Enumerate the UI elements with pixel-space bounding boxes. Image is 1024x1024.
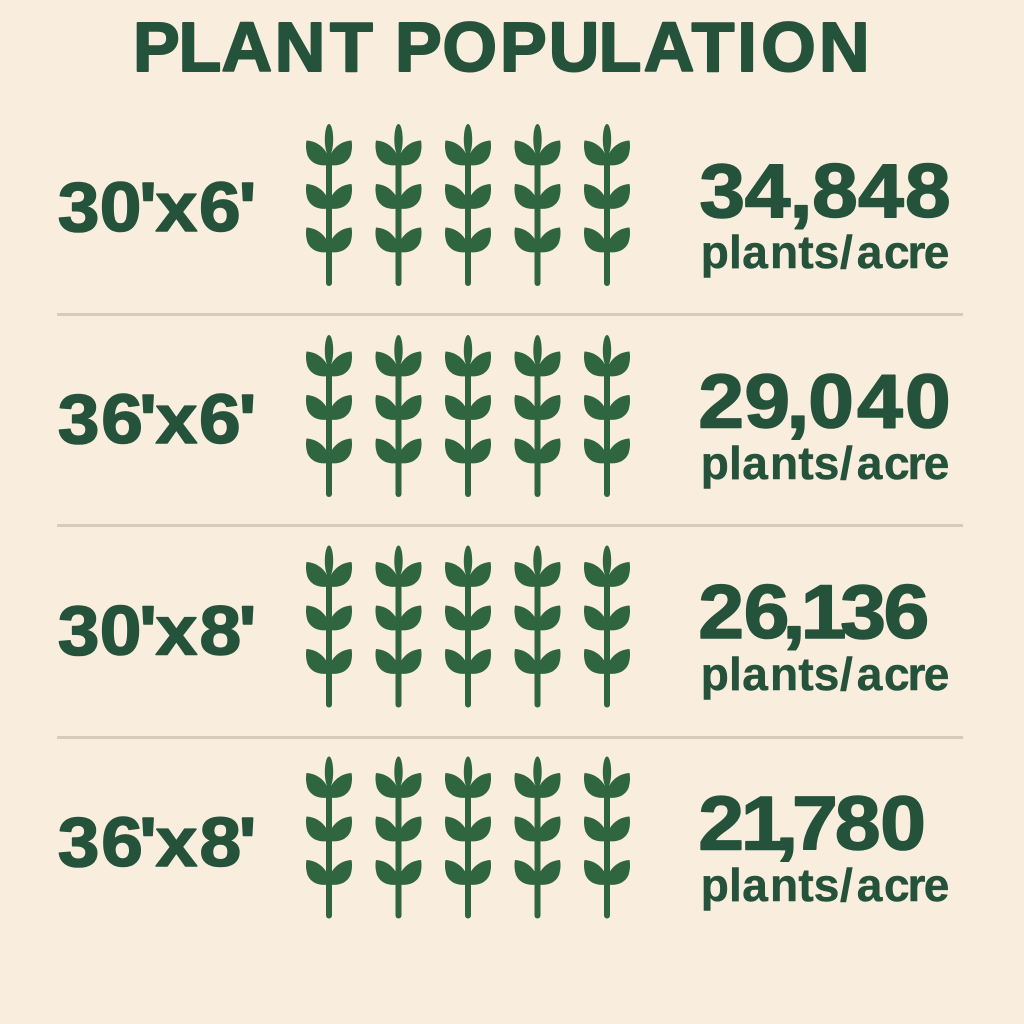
spacing label: 36'x8' [58,803,256,881]
plant icons [306,756,630,918]
spacing label: 36'x6' [58,380,256,458]
row: 30'x8' [58,546,949,708]
population value: 34,848 [699,148,951,233]
unit: plants/acre [701,226,949,278]
population value: 26,136 [698,569,929,654]
unit: plants/acre [701,437,949,489]
spacing label: 30'x8' [58,592,256,670]
spacing label: 30'x6' [58,168,256,246]
unit: plants/acre [701,859,949,911]
population value: 29,040 [698,358,951,444]
population value: 21,780 [698,780,926,866]
plant icons [306,124,630,286]
plant icons [306,546,630,708]
row: 36'x6' [58,335,951,497]
title: PLANT POPULATION [133,8,870,86]
row: 36'x8' [58,756,949,918]
plant icons [306,335,630,497]
unit: plants/acre [701,648,949,700]
row: 30'x6' [58,124,951,286]
